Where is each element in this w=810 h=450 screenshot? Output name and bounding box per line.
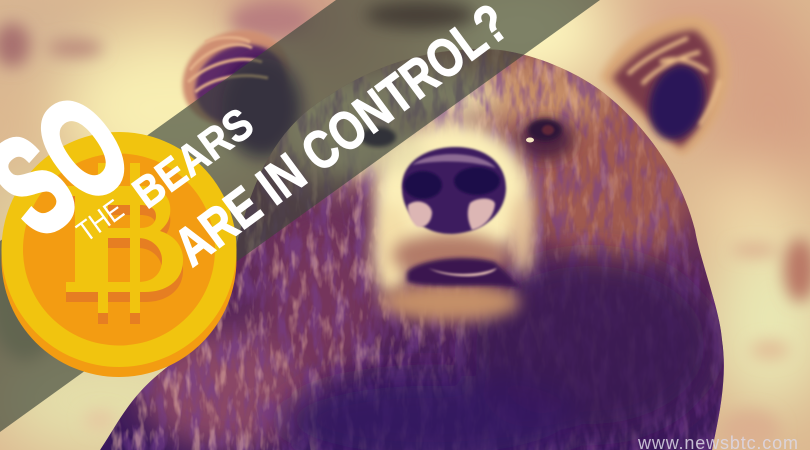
icon: bear right ear [600, 16, 730, 156]
dark neck shading [280, 255, 715, 450]
icon: bear left ear [167, 13, 305, 158]
fur texture [90, 40, 730, 450]
icon: bear nose [402, 147, 506, 234]
banner: translucent diagonal band [0, 0, 600, 432]
bitcoin symbol shadow [66, 173, 183, 324]
icon: bear left eye [360, 127, 396, 147]
heading: THE: THE [71, 193, 130, 248]
bitcoin symbol [66, 163, 183, 313]
heading: ARE IN CONTROL?: ARE IN CONTROL? [164, 0, 519, 278]
icon: bitcoin coin [2, 132, 236, 377]
bear mouth [407, 258, 522, 288]
bear muzzle [325, 120, 574, 322]
bear head and body [100, 49, 724, 450]
heading: BEARS: BEARS [123, 98, 262, 218]
icon: bear right eye [526, 119, 562, 142]
